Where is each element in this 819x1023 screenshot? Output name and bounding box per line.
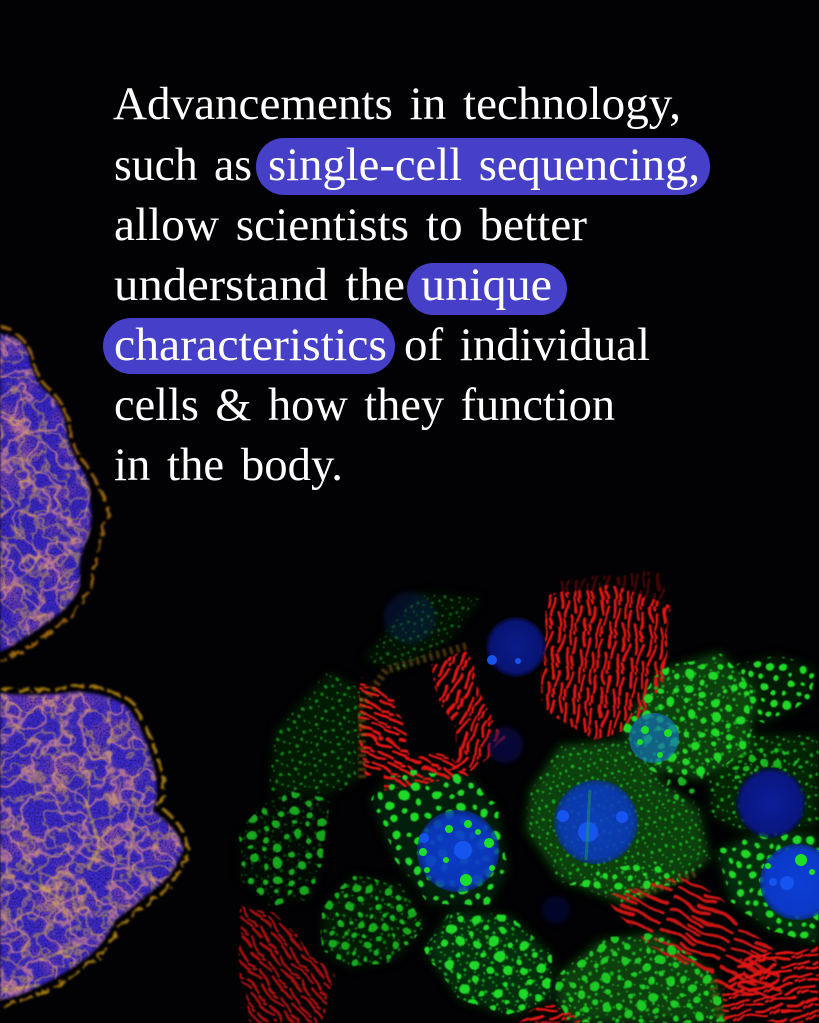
line 1: Advancements in technology, [113, 78, 681, 130]
blue nuclei [384, 592, 819, 924]
micrograph: purple cell clusters at left [0, 326, 188, 1006]
green droplets over nuclei [419, 726, 815, 886]
red strand bundles [238, 572, 819, 1023]
fine green granules [240, 592, 819, 1023]
lower purple cluster [0, 686, 188, 1006]
line 2: such as [114, 139, 252, 191]
line 4: understand the [114, 259, 405, 311]
upper purple cluster [0, 326, 110, 662]
line 3: allow scientists to better [114, 199, 587, 251]
micrograph: green and red cells at lower right [238, 572, 819, 1023]
bright green droplets [240, 652, 819, 1023]
line 2 highlighted: single-cell sequencing, [268, 139, 700, 191]
highlight: characteristics [103, 318, 395, 374]
bright spots on nuclei [419, 655, 794, 890]
text block with highlights [103, 78, 710, 491]
line 5 highlighted: characteristics [114, 319, 387, 371]
green cell body haze [240, 592, 819, 1023]
line 7: in the body. [114, 439, 343, 491]
highlight: single-cell sequencing [256, 138, 710, 195]
orange cell junctions [362, 645, 722, 1023]
line 5: of individual [404, 319, 650, 371]
yellow fibres [0, 800, 100, 990]
highlight: unique [407, 263, 567, 315]
line 4 highlighted: unique [421, 259, 552, 311]
line 6: cells & how they function [114, 379, 615, 431]
